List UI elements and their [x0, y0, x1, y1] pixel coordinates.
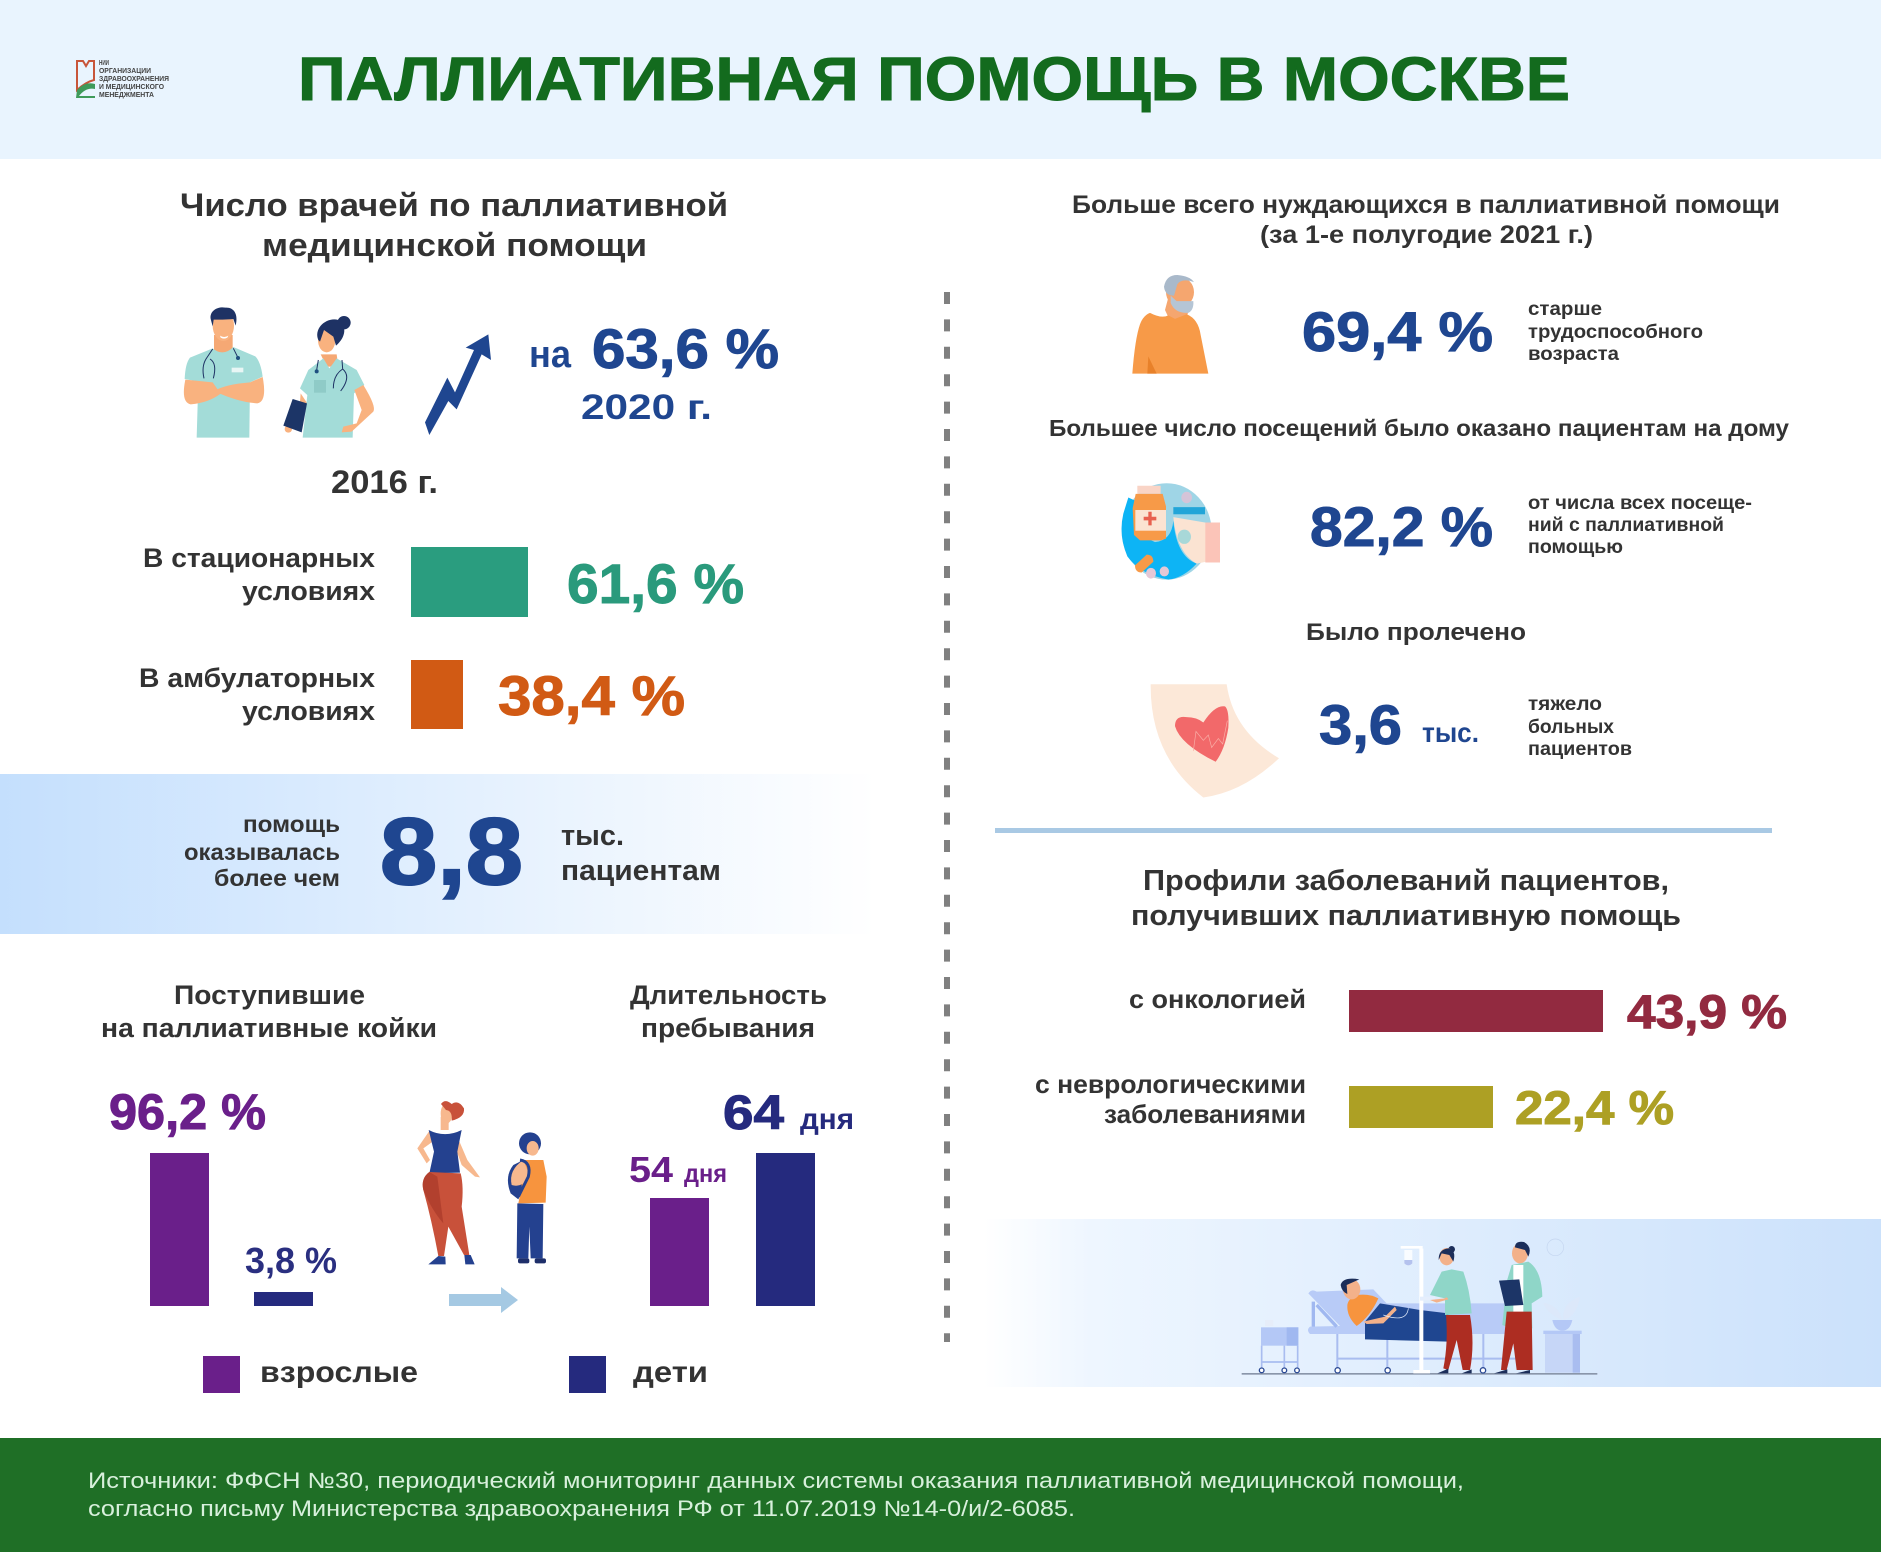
row: inpatient [143, 543, 744, 617]
growth value: 63,6 % [592, 317, 779, 380]
legend: дети [633, 1356, 708, 1389]
illustration: patient, nurse, doctor [1242, 1239, 1597, 1375]
bar chart: admitted [109, 1084, 337, 1306]
title: ПАЛЛИАТИВНАЯ ПОМОЩЬ В МОСКВЕ [298, 45, 1570, 113]
bar chart: length of stay: 54 [629, 1149, 673, 1190]
arrow: pointer to children [449, 1287, 518, 1313]
icon: heart on paper [1151, 684, 1279, 797]
growth value: на [529, 334, 572, 376]
heading: doctors: медицинской помощи [262, 227, 647, 263]
band: 8,8 thousand patients: пациентам [561, 855, 721, 887]
caption: seriously ill patients [1528, 694, 1632, 760]
heading: length of stay: пребывания [641, 1013, 815, 1043]
bar chart: length of stay: 64 [723, 1087, 784, 1140]
row: oncology [1129, 984, 1787, 1038]
row: neurological: 22,4 % [1515, 1081, 1674, 1134]
footer: sources: Источники: ФФСН №30, периодический мониторинг данных системы оказания паллиативной медицинской помощи, [88, 1468, 1464, 1493]
row: outpatient: 38,4 % [498, 664, 685, 727]
boy [508, 1132, 547, 1263]
heading: admitted to beds: на паллиативные койки [101, 1013, 437, 1043]
woman [417, 1101, 480, 1264]
heading: those most in need [1072, 191, 1780, 249]
caption: seriously ill patients: больных [1528, 717, 1614, 738]
label: 2016: 2016 г. [331, 464, 438, 500]
logo [76, 58, 169, 99]
row: oncology: 43,9 % [1627, 985, 1787, 1038]
woman doctor [283, 316, 374, 438]
caption: of all visits [1528, 493, 1752, 558]
legend [203, 1356, 708, 1393]
caption: seriously ill patients: тяжело [1528, 694, 1602, 715]
stat: 3,6 thousand [1319, 693, 1479, 756]
row: neurological [1035, 1069, 1674, 1134]
arrow: growth [425, 334, 491, 435]
caption: older than working age [1528, 299, 1703, 365]
icon: medicines [1122, 483, 1220, 580]
logo: НИИ [99, 58, 109, 67]
caption: seriously ill patients: пациентов [1528, 739, 1632, 760]
heading: home visits: Большее число посещений было оказано пациентам на дому [1049, 415, 1789, 441]
caption: of all visits: помощью [1528, 537, 1623, 558]
stat: 69,4: 69,4 % [1302, 300, 1493, 363]
man doctor [184, 307, 264, 438]
header band [0, 0, 1881, 159]
heading: disease profiles: получивших паллиативную помощь [1131, 900, 1681, 932]
illustration: two doctors [184, 307, 374, 438]
caption: older than working age: трудоспособного [1528, 322, 1703, 343]
band: 8,8 thousand patients: 8,8 [380, 799, 523, 905]
illustration: woman and child [417, 1101, 547, 1264]
band: hospital ward [984, 1219, 1881, 1387]
footer: sources [0, 1438, 1881, 1552]
heading: admitted to beds [101, 980, 437, 1043]
band: 8,8 thousand patients: тыс. [561, 820, 624, 852]
stat: 3,6 thousand: тыс. [1422, 717, 1479, 748]
logo: МЕНЕДЖМЕНТА [99, 90, 155, 99]
icon: elderly man [1132, 275, 1208, 374]
bar chart: admitted: 3,8 % [245, 1240, 337, 1281]
row: inpatient: условиях [242, 576, 375, 606]
row: inpatient: 61,6 % [567, 552, 744, 615]
heading: doctors [180, 187, 728, 263]
row: outpatient [139, 660, 685, 729]
heading: length of stay [630, 980, 827, 1043]
band: 8,8 thousand patients: оказывалась [184, 839, 340, 865]
band: 8,8 thousand patients: более чем [214, 865, 340, 891]
caption: of all visits: от числа всех посеще- [1528, 493, 1752, 514]
heading: those most in need: Больше всего нуждающихся в паллиативной помощи [1072, 191, 1780, 219]
bar chart: admitted: 96,2 % [109, 1084, 266, 1140]
caption: older than working age: старше [1528, 299, 1602, 320]
growth value: 2020 г. [581, 388, 712, 427]
row: neurological: заболеваниями [1104, 1099, 1306, 1129]
bar chart: length of stay [629, 1087, 854, 1306]
logo: ОРГАНИЗАЦИИ [99, 66, 151, 75]
heading: treated: Было пролечено [1306, 619, 1526, 646]
row: oncology: с онкологией [1129, 984, 1306, 1014]
heading: admitted to beds: Поступившие [174, 980, 365, 1010]
row: outpatient: В амбулаторных [139, 663, 375, 693]
heading: length of stay: Длительность [630, 980, 827, 1010]
legend: взрослые [260, 1356, 418, 1389]
band: 8,8 thousand patients: помощь [243, 811, 340, 837]
growth value [529, 317, 779, 427]
stat: 82,2: 82,2 % [1310, 495, 1493, 558]
row: neurological: с неврологическими [1035, 1069, 1306, 1099]
row: inpatient: В стационарных [143, 543, 375, 573]
footer: sources: согласно письму Министерства здравоохранения РФ от 11.07.2019 №14-0/и/2-6085. [88, 1496, 1075, 1521]
heading: doctors: Число врачей по паллиативной [180, 187, 728, 223]
logo: ЗДРАВООХРАНЕНИЯ [99, 74, 169, 83]
row: outpatient: условиях [242, 696, 375, 726]
caption: of all visits: ний с паллиативной [1528, 515, 1724, 536]
logo: И МЕДИЦИНСКОГО [99, 82, 164, 91]
heading: disease profiles [1131, 865, 1681, 932]
stat: 3,6 thousand: 3,6 [1319, 693, 1402, 756]
heading: those most in need: (за 1-е полугодие 2021 г.) [1260, 221, 1593, 249]
heading: disease profiles: Профили заболеваний пациентов, [1143, 865, 1669, 897]
bar chart: length of stay: дня [684, 1160, 727, 1188]
band: 8,8 thousand patients [0, 774, 876, 934]
bar chart: length of stay: дня [800, 1103, 854, 1136]
caption: older than working age: возраста [1528, 344, 1619, 365]
